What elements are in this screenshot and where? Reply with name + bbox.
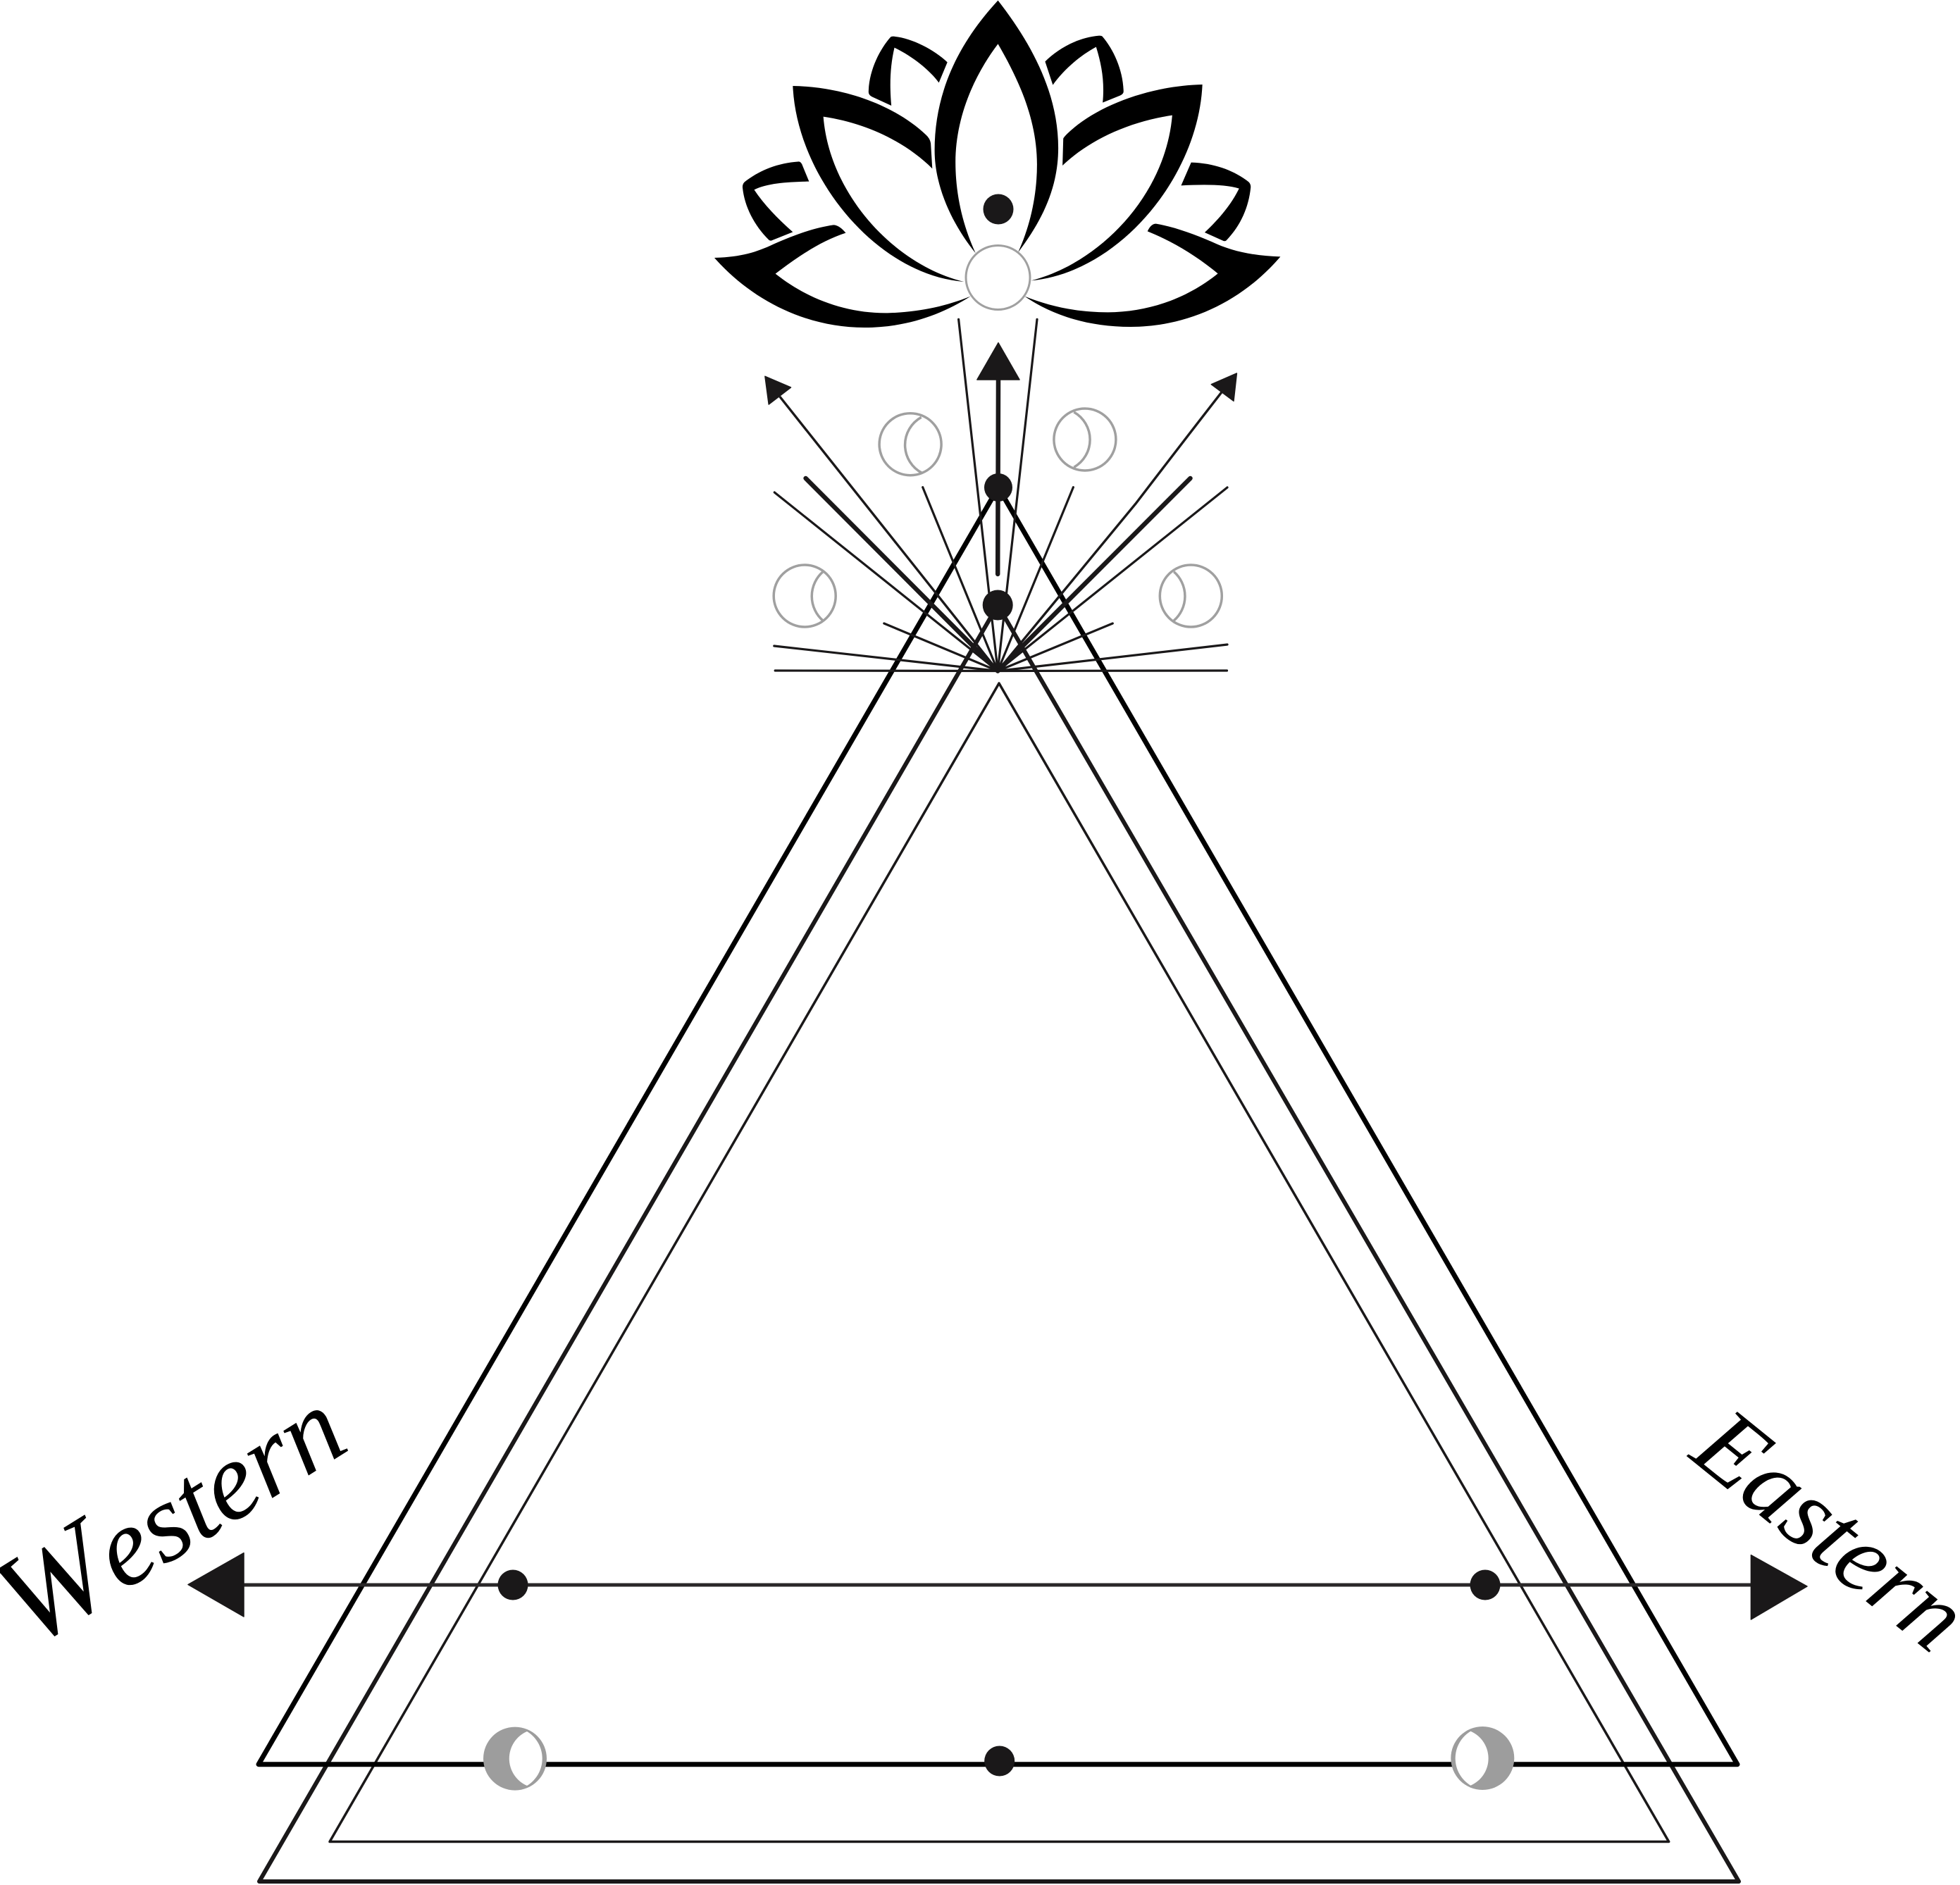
petal: small top right — [1045, 36, 1124, 103]
arrow: upper right diagonal — [998, 373, 1236, 671]
arrow: vertical centre — [977, 343, 1019, 574]
petal: large left — [793, 86, 964, 282]
triangle: inner thin — [330, 683, 1669, 1841]
petal: small top left — [869, 37, 948, 106]
lotus seed dot — [984, 194, 1013, 224]
petal: small mid left — [743, 161, 809, 241]
rays fanning from hub — [774, 319, 1227, 671]
moon: base right — [1451, 1727, 1514, 1790]
petal: small mid right — [1181, 163, 1251, 241]
horizontal double arrow: Western to Eastern — [188, 1553, 1807, 1619]
dot: base centre — [984, 1746, 1015, 1777]
petal: lower left — [714, 225, 971, 328]
moon outlines around rays — [774, 409, 1222, 627]
moon: upper right — [1054, 409, 1116, 471]
dot: lower axis node — [983, 590, 1013, 620]
dot: upper axis node — [984, 473, 1012, 502]
dot: right on horizontal arrow — [1470, 1569, 1501, 1600]
moon: upper left — [879, 413, 941, 475]
lotus petals — [714, 1, 1280, 328]
triangle: upper thick — [259, 487, 1737, 1765]
dot: left on horizontal arrow — [497, 1569, 528, 1600]
lotus centre circle — [966, 245, 1030, 310]
lotus flower — [714, 1, 1280, 328]
moon: lower right — [1160, 565, 1222, 627]
moon: lower left — [774, 565, 836, 627]
arrow: upper left diagonal — [765, 376, 998, 671]
petal: lower right — [1024, 224, 1280, 327]
petal: large right — [1031, 85, 1203, 280]
triangle: lower medium — [259, 605, 1739, 1881]
moon: base left — [483, 1727, 547, 1791]
petal: centre — [935, 1, 1058, 253]
